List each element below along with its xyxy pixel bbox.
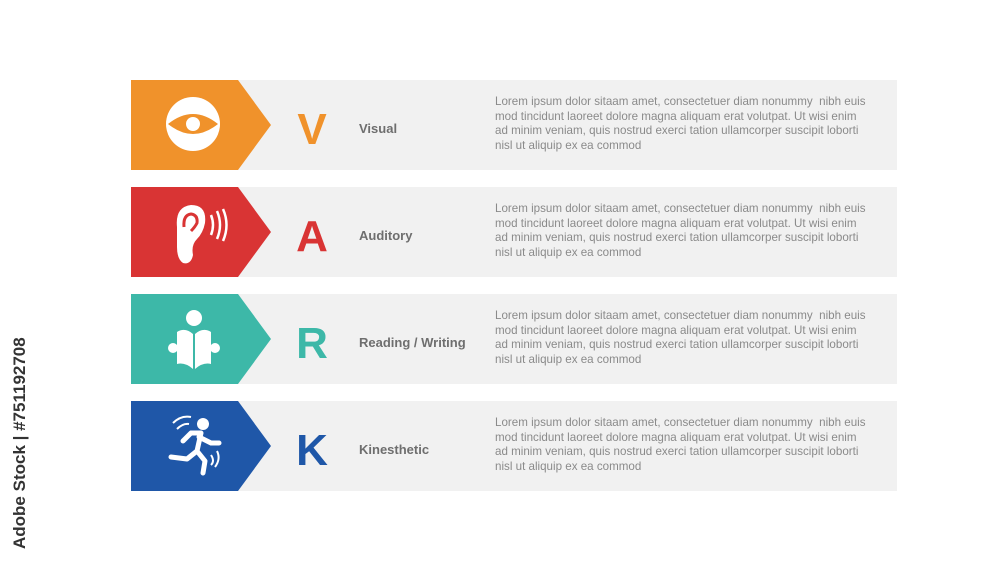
letter A: A — [296, 212, 328, 261]
label: Visual — [359, 121, 397, 136]
body text: Lorem ipsum dolor sitaam amet, consectetuer diam nonummy nibh euis — [495, 309, 866, 322]
row: auditory — [131, 187, 897, 277]
body text — [495, 202, 866, 259]
label: Reading / Writing — [359, 335, 466, 350]
tag: orange with eye icon — [131, 80, 271, 170]
body text: nisl ut aliquip ex ea commod — [495, 246, 641, 259]
body text — [495, 309, 866, 366]
body text — [495, 95, 866, 152]
letter K: K — [296, 426, 328, 475]
body text: ad minim veniam, quis nostrud exerci tation ullamcorper suscipit loborti — [495, 445, 858, 458]
row: kinesthetic — [131, 401, 897, 491]
body text: mod tincidunt laoreet dolore magna aliquam erat volutpat. Ut wisi enim — [495, 217, 857, 230]
label: Auditory — [359, 228, 412, 243]
label: Kinesthetic — [359, 442, 429, 457]
letter V: V — [297, 105, 327, 154]
body text: Lorem ipsum dolor sitaam amet, consectetuer diam nonummy nibh euis — [495, 416, 866, 429]
body text — [495, 416, 866, 473]
row: reading/writing — [131, 294, 897, 384]
body text: mod tincidunt laoreet dolore magna aliquam erat volutpat. Ut wisi enim — [495, 110, 857, 123]
body text: ad minim veniam, quis nostrud exerci tation ullamcorper suscipit loborti — [495, 231, 858, 244]
body text: mod tincidunt laoreet dolore magna aliquam erat volutpat. Ut wisi enim — [495, 324, 857, 337]
row: visual — [131, 80, 897, 170]
body text: mod tincidunt laoreet dolore magna aliquam erat volutpat. Ut wisi enim — [495, 431, 857, 444]
letter R: R — [296, 319, 328, 368]
body text: nisl ut aliquip ex ea commod — [495, 139, 641, 152]
tag: red with ear icon — [131, 187, 271, 277]
body text: ad minim veniam, quis nostrud exerci tation ullamcorper suscipit loborti — [495, 338, 858, 351]
body text: Lorem ipsum dolor sitaam amet, consectetuer diam nonummy nibh euis — [495, 95, 866, 108]
tag: blue with running icon — [131, 401, 271, 491]
body text: ad minim veniam, quis nostrud exerci tation ullamcorper suscipit loborti — [495, 124, 858, 137]
body text: nisl ut aliquip ex ea commod — [495, 460, 641, 473]
body text: Lorem ipsum dolor sitaam amet, consectetuer diam nonummy nibh euis — [495, 202, 866, 215]
tag: teal with reader icon — [131, 294, 271, 384]
watermark id: Adobe Stock | #751192708 — [10, 337, 29, 549]
body text: nisl ut aliquip ex ea commod — [495, 353, 641, 366]
